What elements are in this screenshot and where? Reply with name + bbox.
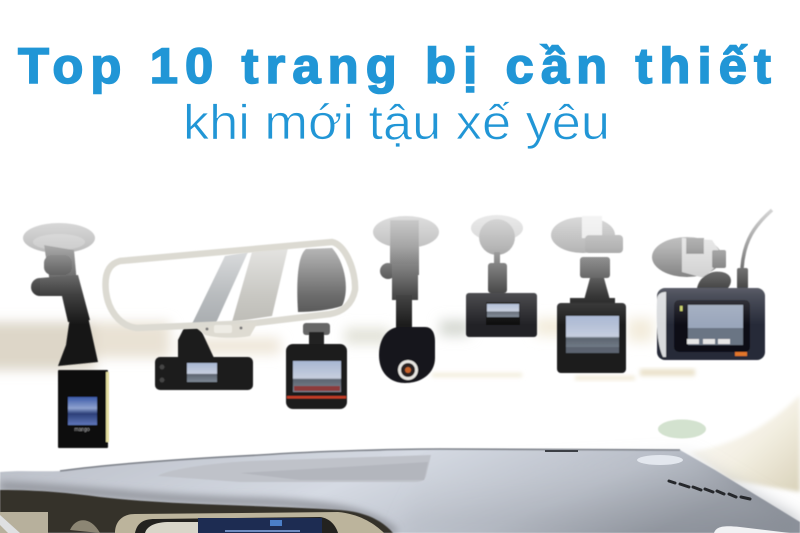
air vent right: [714, 526, 790, 533]
dashboard main surface: [0, 449, 800, 533]
dashboard right shade: [400, 456, 800, 533]
green badge on windshield: [658, 420, 706, 438]
mirror reflection: [190, 248, 346, 328]
title: Top 10 trang bị cần thiết: [18, 38, 778, 94]
navigation screen: [198, 518, 322, 533]
windshield sensor: [637, 455, 683, 465]
lip shade: [0, 486, 395, 533]
defrost vents: [669, 481, 750, 499]
photo: dashcams on windshield: [0, 205, 800, 533]
right windshield pillar: [690, 395, 800, 492]
camera 7: [652, 210, 772, 360]
camera 4: [373, 216, 439, 383]
windshield edge line: [60, 449, 680, 471]
camera 2: [155, 328, 253, 390]
camera 5: [466, 215, 537, 337]
subtitle: khi mới tậu xế yêu: [183, 96, 610, 150]
car dashboard: [0, 449, 800, 533]
camera 3: [286, 323, 347, 409]
console frame: [115, 512, 384, 533]
top fade overlay: [0, 205, 800, 325]
rear-view mirror: [106, 242, 355, 338]
horizon landscape: [0, 318, 653, 370]
hood display panel: [158, 455, 431, 482]
camera 1: [23, 223, 109, 448]
console interior: [0, 490, 393, 533]
camera 1 brand: mango: [74, 427, 90, 433]
camera 6: [551, 216, 626, 373]
roadside strip: [432, 369, 695, 380]
